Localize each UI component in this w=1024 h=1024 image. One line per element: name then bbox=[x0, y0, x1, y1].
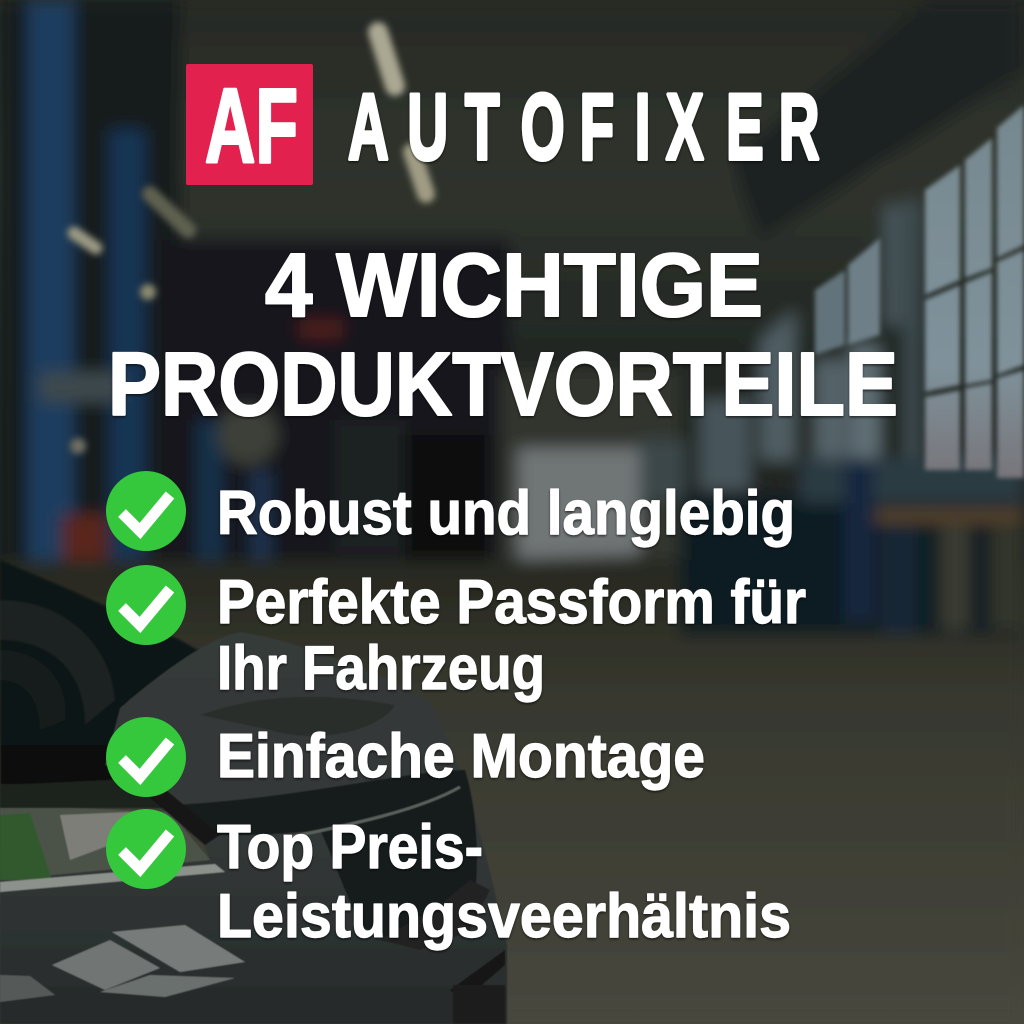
title: 4 WICHTIGE bbox=[265, 236, 763, 336]
logo: AF red square bbox=[186, 64, 313, 185]
car in the foreground bbox=[0, 560, 507, 1024]
benefit 3: Einfache Montage bbox=[217, 722, 705, 791]
benefit 2: Perfekte Passform für bbox=[217, 568, 806, 637]
title bbox=[108, 236, 898, 435]
benefit 2: Ihr Fahrzeug bbox=[217, 634, 545, 703]
benefit 4: Top Preis- bbox=[217, 813, 483, 882]
icon: green check bbox=[106, 471, 186, 551]
icon: green check bbox=[106, 565, 186, 645]
benefit 2 bbox=[106, 565, 806, 703]
benefit 1: Robust und langlebig bbox=[217, 479, 795, 548]
benefit 3 bbox=[106, 717, 705, 797]
benefit 1 bbox=[106, 471, 795, 551]
icon: green check bbox=[106, 717, 186, 797]
benefit 4 bbox=[106, 809, 791, 951]
logo: AF red square: AF bbox=[205, 67, 298, 185]
brand name: AUTOFIXER: AUTOFIXER bbox=[348, 75, 820, 180]
benefit 4: Leistungsveerhältnis bbox=[217, 882, 791, 951]
title: PRODUKTVORTEILE bbox=[108, 335, 898, 435]
icon: green check bbox=[106, 809, 186, 889]
